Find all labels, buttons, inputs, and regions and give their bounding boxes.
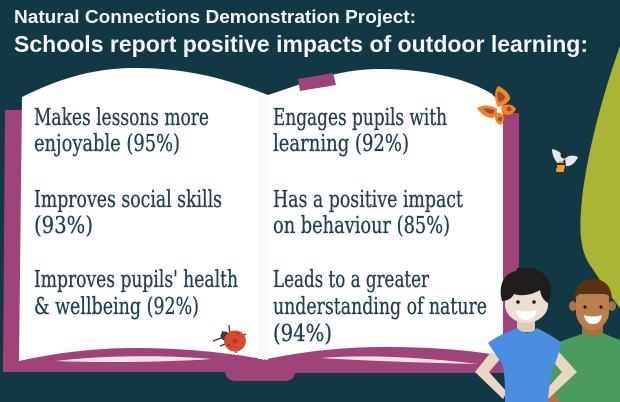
text: left column: & wellbeing (92%) — [34, 294, 199, 320]
smile — [516, 310, 537, 320]
arms — [475, 352, 577, 399]
text: left column: Improves pupils' health — [34, 267, 238, 293]
text: left column: enjoyable (95%) — [34, 131, 180, 157]
hair — [501, 267, 551, 303]
person: man in green shirt — [543, 279, 620, 402]
text: right column: Leads to a greater — [273, 267, 429, 293]
icon: ladybug — [213, 325, 246, 353]
text: right column: understanding of nature — [273, 294, 487, 320]
face — [576, 290, 609, 330]
face — [505, 285, 548, 323]
eyes — [583, 305, 587, 309]
spine shadow — [258, 97, 268, 359]
ears — [569, 301, 577, 311]
text: left column: Improves social skills — [34, 187, 222, 213]
smile — [584, 315, 602, 324]
right page — [262, 69, 503, 360]
bookmark — [298, 73, 336, 91]
page edge highlights — [56, 356, 212, 362]
text: left column — [34, 105, 238, 320]
text: right column: (94%) — [273, 321, 332, 347]
olive green hill — [580, 46, 620, 308]
book cover — [3, 110, 519, 381]
title: Schools report positive impacts of outdoor learning: — [14, 31, 588, 57]
text: right column: Has a positive impact — [273, 187, 464, 213]
neck — [517, 318, 535, 332]
text: right column: on behaviour (85%) — [273, 213, 450, 239]
left page — [19, 68, 268, 361]
eyes — [516, 300, 520, 304]
text: right column: learning (92%) — [273, 131, 409, 157]
text: right column: Engages pupils with — [273, 105, 447, 131]
neck — [582, 322, 603, 338]
title — [14, 7, 588, 57]
person: woman in blue shirt — [475, 267, 577, 402]
blue shirt — [488, 328, 562, 402]
icon: bee — [552, 149, 578, 172]
text: right column — [273, 105, 487, 347]
open book — [3, 68, 519, 381]
hair — [574, 279, 612, 304]
green shirt — [546, 333, 620, 402]
text: left column: Makes lessons more — [34, 105, 209, 131]
arm — [543, 372, 560, 402]
title: Natural Connections Demonstration Project: — [14, 7, 416, 27]
text: left column: (93%) — [34, 213, 93, 239]
icon: butterfly — [477, 86, 516, 125]
